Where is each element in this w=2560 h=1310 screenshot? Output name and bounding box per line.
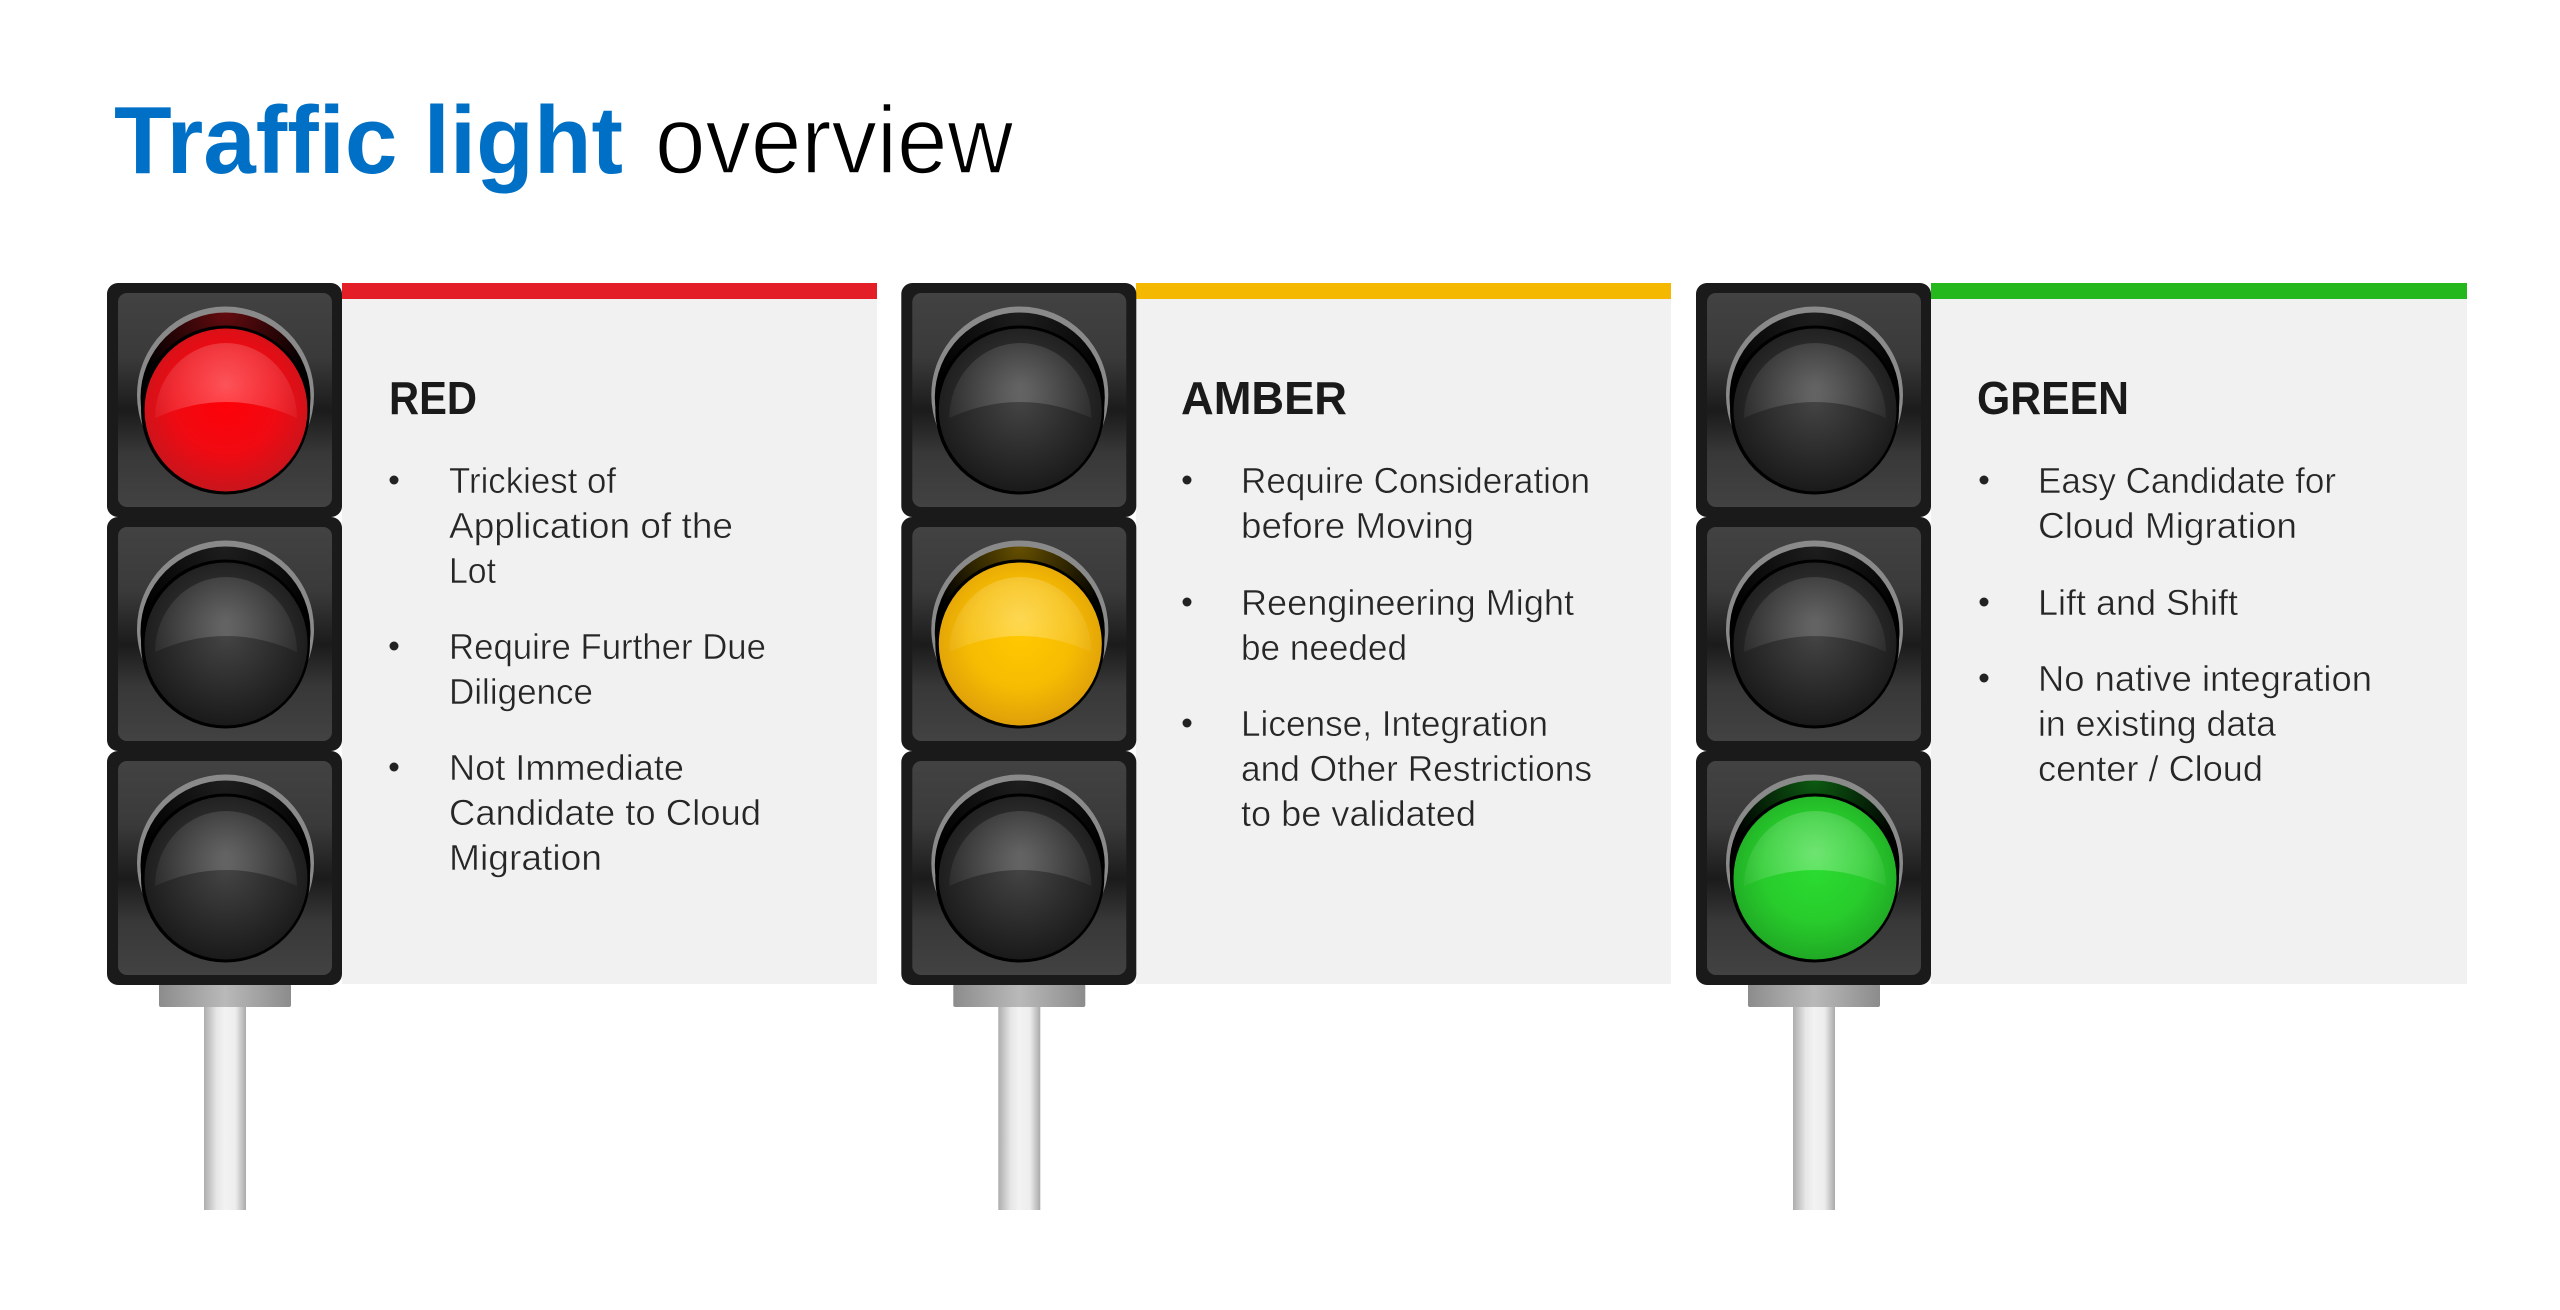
panel: green bbox=[1931, 283, 2467, 984]
red bullet list: Lot bbox=[449, 550, 496, 591]
pole bbox=[1748, 984, 1880, 1210]
red bullet list: Not Immediate bbox=[449, 747, 684, 788]
red panel background bbox=[342, 283, 877, 984]
amber bullet list: be needed bbox=[1241, 627, 1407, 668]
red bullet list: Application of the bbox=[449, 505, 733, 546]
title bbox=[114, 87, 1014, 194]
red bullet list: Require Further Due bbox=[449, 626, 766, 667]
green bullet list: Cloud Migration bbox=[2038, 505, 2297, 546]
green bullet list: No native integration bbox=[2038, 658, 2372, 699]
amber bullet list bbox=[1182, 460, 1592, 834]
amber bullet list: and Other Restrictions bbox=[1241, 748, 1592, 789]
top lamp off bbox=[1696, 283, 1931, 517]
red lamp on bbox=[107, 283, 342, 517]
traffic light: red lit bbox=[107, 283, 342, 1210]
panel: amber bbox=[1136, 283, 1671, 984]
middle lamp off bbox=[107, 517, 342, 751]
middle lamp off bbox=[1696, 517, 1931, 751]
title: Traffic light bbox=[114, 87, 623, 194]
bottom lamp off bbox=[107, 751, 342, 985]
pole bbox=[159, 984, 291, 1210]
red bullet list: Trickiest of bbox=[449, 460, 617, 501]
amber bullet list: before Moving bbox=[1241, 505, 1474, 546]
red bullet list bbox=[390, 460, 766, 878]
green panel background bbox=[1931, 283, 2467, 984]
amber panel background bbox=[1136, 283, 1671, 984]
panel: red bbox=[342, 283, 877, 984]
green lamp on bbox=[1696, 751, 1931, 985]
amber heading: AMBER bbox=[1181, 372, 1347, 424]
green accent bar bbox=[1931, 283, 2467, 299]
red bullet list: Candidate to Cloud bbox=[449, 792, 761, 833]
green bullet list bbox=[1980, 460, 2372, 789]
top lamp off bbox=[901, 283, 1136, 517]
bottom lamp off bbox=[901, 751, 1136, 985]
amber lamp on bbox=[901, 517, 1136, 751]
amber bullet list: to be validated bbox=[1241, 793, 1476, 834]
green bullet list: center / Cloud bbox=[2038, 748, 2263, 789]
red bullet list: Diligence bbox=[449, 671, 593, 712]
red bullet list: Migration bbox=[449, 837, 602, 878]
red heading: RED bbox=[389, 372, 477, 424]
pole bbox=[953, 984, 1085, 1210]
amber accent bar bbox=[1136, 283, 1671, 299]
green heading: GREEN bbox=[1977, 372, 2129, 424]
title: overview bbox=[655, 87, 1014, 194]
green bullet list: Easy Candidate for bbox=[2038, 460, 2336, 501]
green bullet list: in existing data bbox=[2038, 703, 2277, 744]
traffic light: green lit bbox=[1696, 283, 1931, 1210]
red accent bar bbox=[342, 283, 877, 299]
green bullet list: Lift and Shift bbox=[2038, 582, 2238, 623]
amber bullet list: Reengineering Might bbox=[1241, 582, 1574, 623]
traffic light: amber lit bbox=[901, 283, 1136, 1210]
amber bullet list: Require Consideration bbox=[1241, 460, 1590, 501]
amber bullet list: License, Integration bbox=[1241, 703, 1548, 744]
